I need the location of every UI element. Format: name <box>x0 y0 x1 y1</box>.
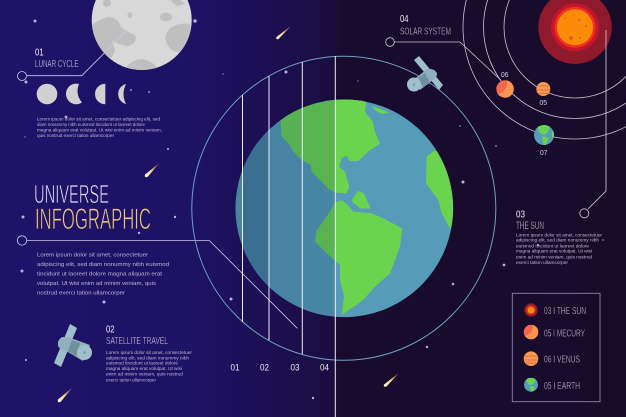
text: satellite travel: exerci tation ullamcorper <box>106 377 156 383</box>
text: lunar cycle: Lorem ipsum dolor sit amet, consectetuer adipiscing elit, sed <box>37 116 160 122</box>
title connector <box>17 236 297 328</box>
heading: satellite travel <box>106 324 168 347</box>
text: the sun: magna aliquam erat volutpat. Ut wisi <box>516 249 592 255</box>
comet: bottom centre <box>384 372 400 387</box>
text: lunar cycle <box>37 116 162 139</box>
moon phases <box>37 84 126 104</box>
planet labels <box>501 72 548 157</box>
text: lunar cycle: magna aliquam erat volutpat. Ut wisi enim ad minim veniam, <box>37 128 162 134</box>
guide line labels <box>230 363 329 374</box>
text: intro <box>37 252 169 296</box>
heading: solar system <box>400 14 451 37</box>
comet: left middle <box>145 162 160 177</box>
phase: gibbous <box>66 84 82 104</box>
title: INFOGRAPHIC <box>35 203 151 236</box>
outer orbit ring <box>192 56 496 360</box>
heading: the sun: 03 <box>516 208 525 220</box>
sun connector <box>580 30 606 218</box>
text: satellite travel: magna aliquam erat volutpat. Ut wisi <box>106 366 182 372</box>
text: satellite travel: enim ad minim veniam, quis nostrud <box>106 371 183 377</box>
solar system orbits <box>463 0 626 139</box>
icon: satellite bottom left <box>54 324 92 367</box>
text: the sun: euismod tincidunt ut laoreet dolore <box>516 243 589 249</box>
guide line labels: 02 <box>260 363 269 374</box>
text: intro: tincidunt ut laoreet dolore magna aliquam erat <box>37 271 162 277</box>
legend: venus: 06 I VENUS <box>544 354 580 365</box>
phase: full <box>37 84 57 104</box>
guide line labels: 03 <box>290 363 300 374</box>
title: UNIVERSE <box>34 179 109 209</box>
text: intro: volutpat. Ut wisi enim ad minim veniam, quis <box>37 281 156 287</box>
heading: lunar cycle: 01 <box>35 48 44 58</box>
heading: satellite travel: SATELLITE TRAVEL <box>106 335 168 347</box>
heading: lunar cycle <box>35 48 78 70</box>
comet: top centre <box>276 25 292 39</box>
earth <box>230 93 457 325</box>
text: satellite travel: adipiscing elit, sed diam nonummy nibh <box>106 355 189 361</box>
text: lunar cycle: diam nonummy nibh euismod tincidunt ut laoreet dolore <box>37 122 145 128</box>
land masses <box>281 93 457 315</box>
guide line labels: 01 <box>230 363 240 374</box>
legend: earth: 05 I EARTH <box>544 381 580 392</box>
text: the sun: adipiscing elit, sed diam nonummy nibh <box>516 238 599 244</box>
sun <box>538 0 612 64</box>
shaded bands <box>236 172 242 244</box>
lunar cycle connector <box>18 31 127 80</box>
comet: bottom left <box>58 387 73 402</box>
heading: solar system: 04 <box>400 14 409 25</box>
planet labels: 07 <box>540 150 548 157</box>
heading: the sun <box>516 208 544 232</box>
solar system connector <box>386 38 501 80</box>
text: the sun: exerci tation ullamcorper <box>516 260 568 266</box>
icon: satellite top right <box>407 56 443 92</box>
text: the sun <box>516 232 602 266</box>
comets <box>58 25 400 402</box>
legend panel <box>512 293 600 402</box>
text: satellite travel: euismod tincidunt ut laoreet dolore <box>106 361 178 367</box>
title <box>34 179 151 236</box>
heading: lunar cycle: LUNAR CYCLE <box>35 58 78 70</box>
text: satellite travel: Lorem ipsum dolor sit amet, consectetuer <box>106 350 192 356</box>
planet 07 earth <box>534 125 554 145</box>
heading: satellite travel: 02 <box>106 324 115 336</box>
text: intro: adipiscing elit, sed diam nonummy nibh euismod <box>37 262 169 268</box>
planet 05 <box>536 82 550 96</box>
guide lines <box>242 56 335 417</box>
text: the sun: enim ad minim veniam, quis nostrud <box>516 254 592 260</box>
legend: mercury: 05 I MECURY <box>544 329 585 340</box>
text: the sun: Lorem ipsum dolor sit amet, consectetuer <box>516 232 602 238</box>
text: intro: nostrud exerci tation ullamcorper <box>37 290 125 296</box>
planet 06 <box>496 80 514 98</box>
guide line labels: 04 <box>320 363 329 374</box>
heading: the sun: THE SUN <box>516 220 544 232</box>
heading: solar system: SOLAR SYSTEM <box>400 26 451 37</box>
phase: half <box>95 84 105 104</box>
planet labels: 05 <box>540 100 547 107</box>
planet labels: 06 <box>501 72 509 79</box>
text: satellite travel <box>106 350 192 383</box>
phase: crescent <box>118 84 126 104</box>
text: intro: Lorem ipsum dolor sit amet, consectetuer <box>37 252 148 258</box>
legend: the sun: 03 I THE SUN <box>544 306 586 317</box>
text: lunar cycle: quis nostrud exerci tation ullamcorper <box>37 133 114 139</box>
moon <box>92 0 192 74</box>
